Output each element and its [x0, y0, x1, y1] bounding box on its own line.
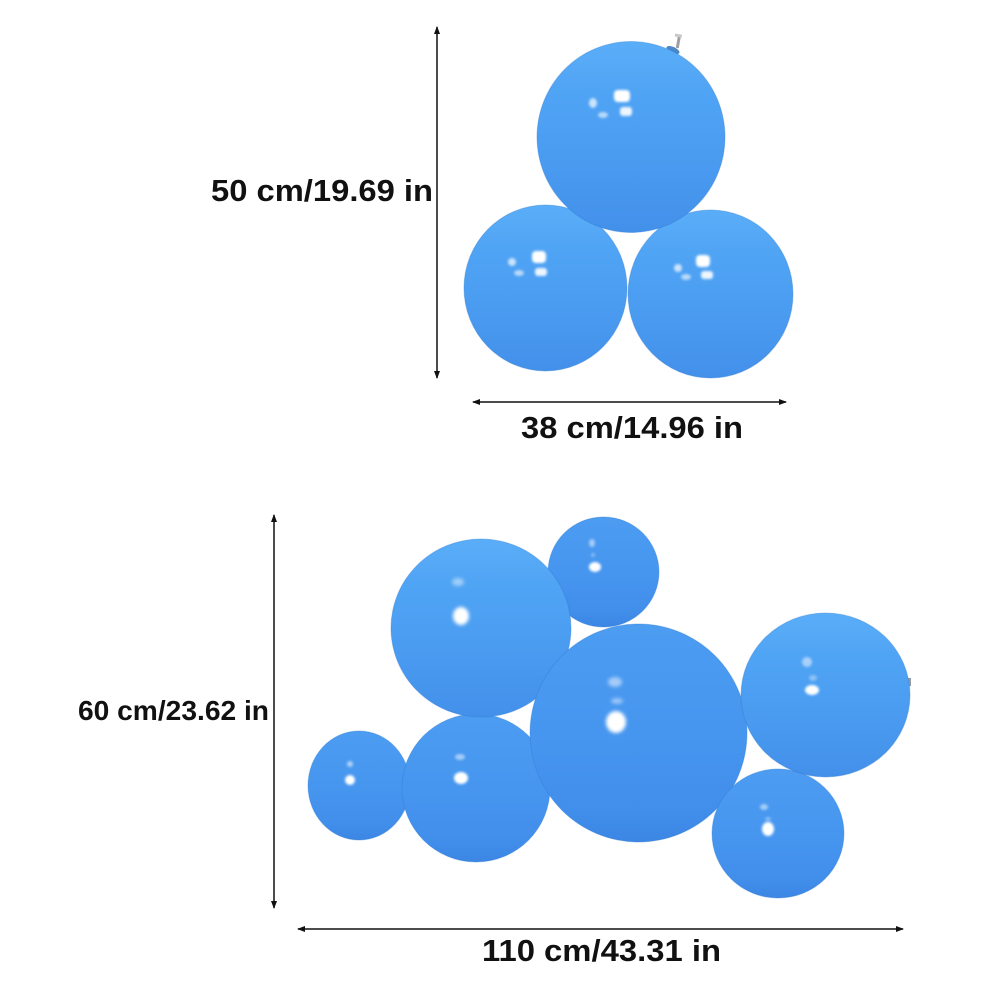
balloon: small top — [548, 517, 659, 627]
balloon: far left small — [308, 731, 410, 840]
dimension arrow: height of bottom cluster — [273, 515, 275, 908]
balloon: bottom left — [464, 205, 627, 371]
balloon: top — [537, 42, 725, 232]
balloon cluster: seven balloons — [308, 517, 911, 898]
dimension label: 50 cm: 50 cm/19.69 in — [211, 173, 433, 208]
balloon valve — [665, 33, 682, 56]
balloon: lower right — [712, 769, 844, 898]
dimension label: 60 cm: 60 cm/23.62 in — [78, 695, 269, 726]
dimension label: 110 cm: 110 cm/43.31 in — [482, 933, 721, 968]
dimension label: 38 cm: 38 cm/14.96 in — [521, 410, 743, 445]
dimension arrow: height of top cluster — [436, 27, 438, 378]
balloon: right — [741, 613, 911, 777]
balloon: upper left large — [391, 539, 571, 717]
balloon: bottom right — [628, 210, 793, 378]
dimension arrow: width of top cluster — [473, 401, 786, 403]
balloon: centre largest — [530, 624, 747, 842]
balloon: lower left — [402, 714, 550, 862]
dimension arrow: width of bottom cluster — [298, 928, 903, 930]
balloon cluster: three balloons — [464, 33, 793, 378]
